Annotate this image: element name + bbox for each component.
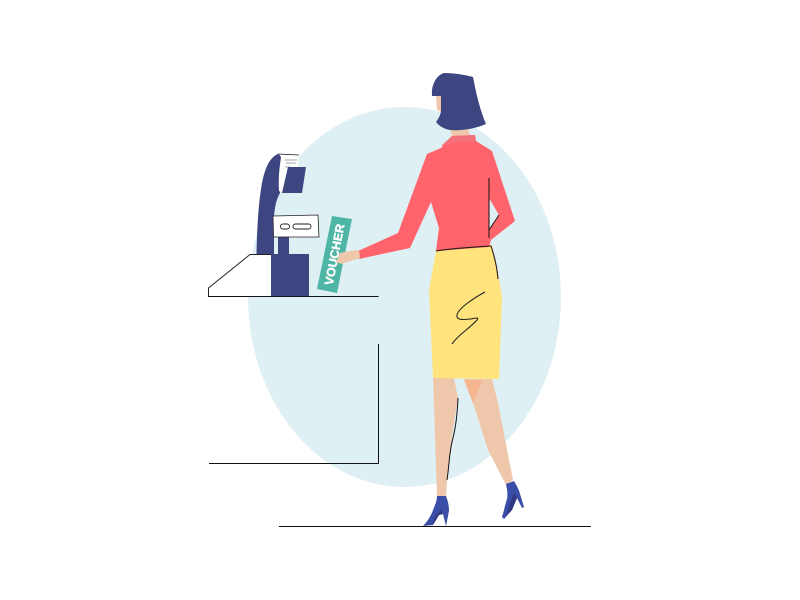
receipt top edge [278,154,299,155]
desk outline [209,344,378,464]
right shoe shade [506,493,517,516]
receipt lines [285,160,297,167]
receipt paper [279,154,299,193]
receipt flap [282,167,306,193]
floor line [279,526,591,528]
left shoe shade [433,510,443,525]
hair [432,73,486,130]
left leg [433,378,458,497]
gap between arm and torso [489,198,499,230]
face [436,96,441,112]
leg outline [447,398,458,480]
kiosk panel [273,215,319,237]
blouse lines [436,178,499,279]
counter line [208,296,378,298]
kiosk base [271,254,309,296]
woman [336,73,524,526]
counter outline [208,254,271,296]
voucher [317,216,352,293]
collar [441,135,476,146]
voucher: VOUCHER [322,222,348,286]
right leg [464,379,513,485]
blouse [358,135,515,259]
counter and kiosk [208,154,378,296]
leg shadow [464,380,482,403]
background blob [248,107,561,487]
skirt fold [452,292,485,344]
left shoe [423,496,449,526]
kiosk arch [256,154,298,254]
neck [450,128,470,137]
right shoe [502,481,524,519]
kiosk column [278,236,289,256]
skirt [429,245,502,379]
counter front [208,254,271,296]
hand [336,250,360,264]
